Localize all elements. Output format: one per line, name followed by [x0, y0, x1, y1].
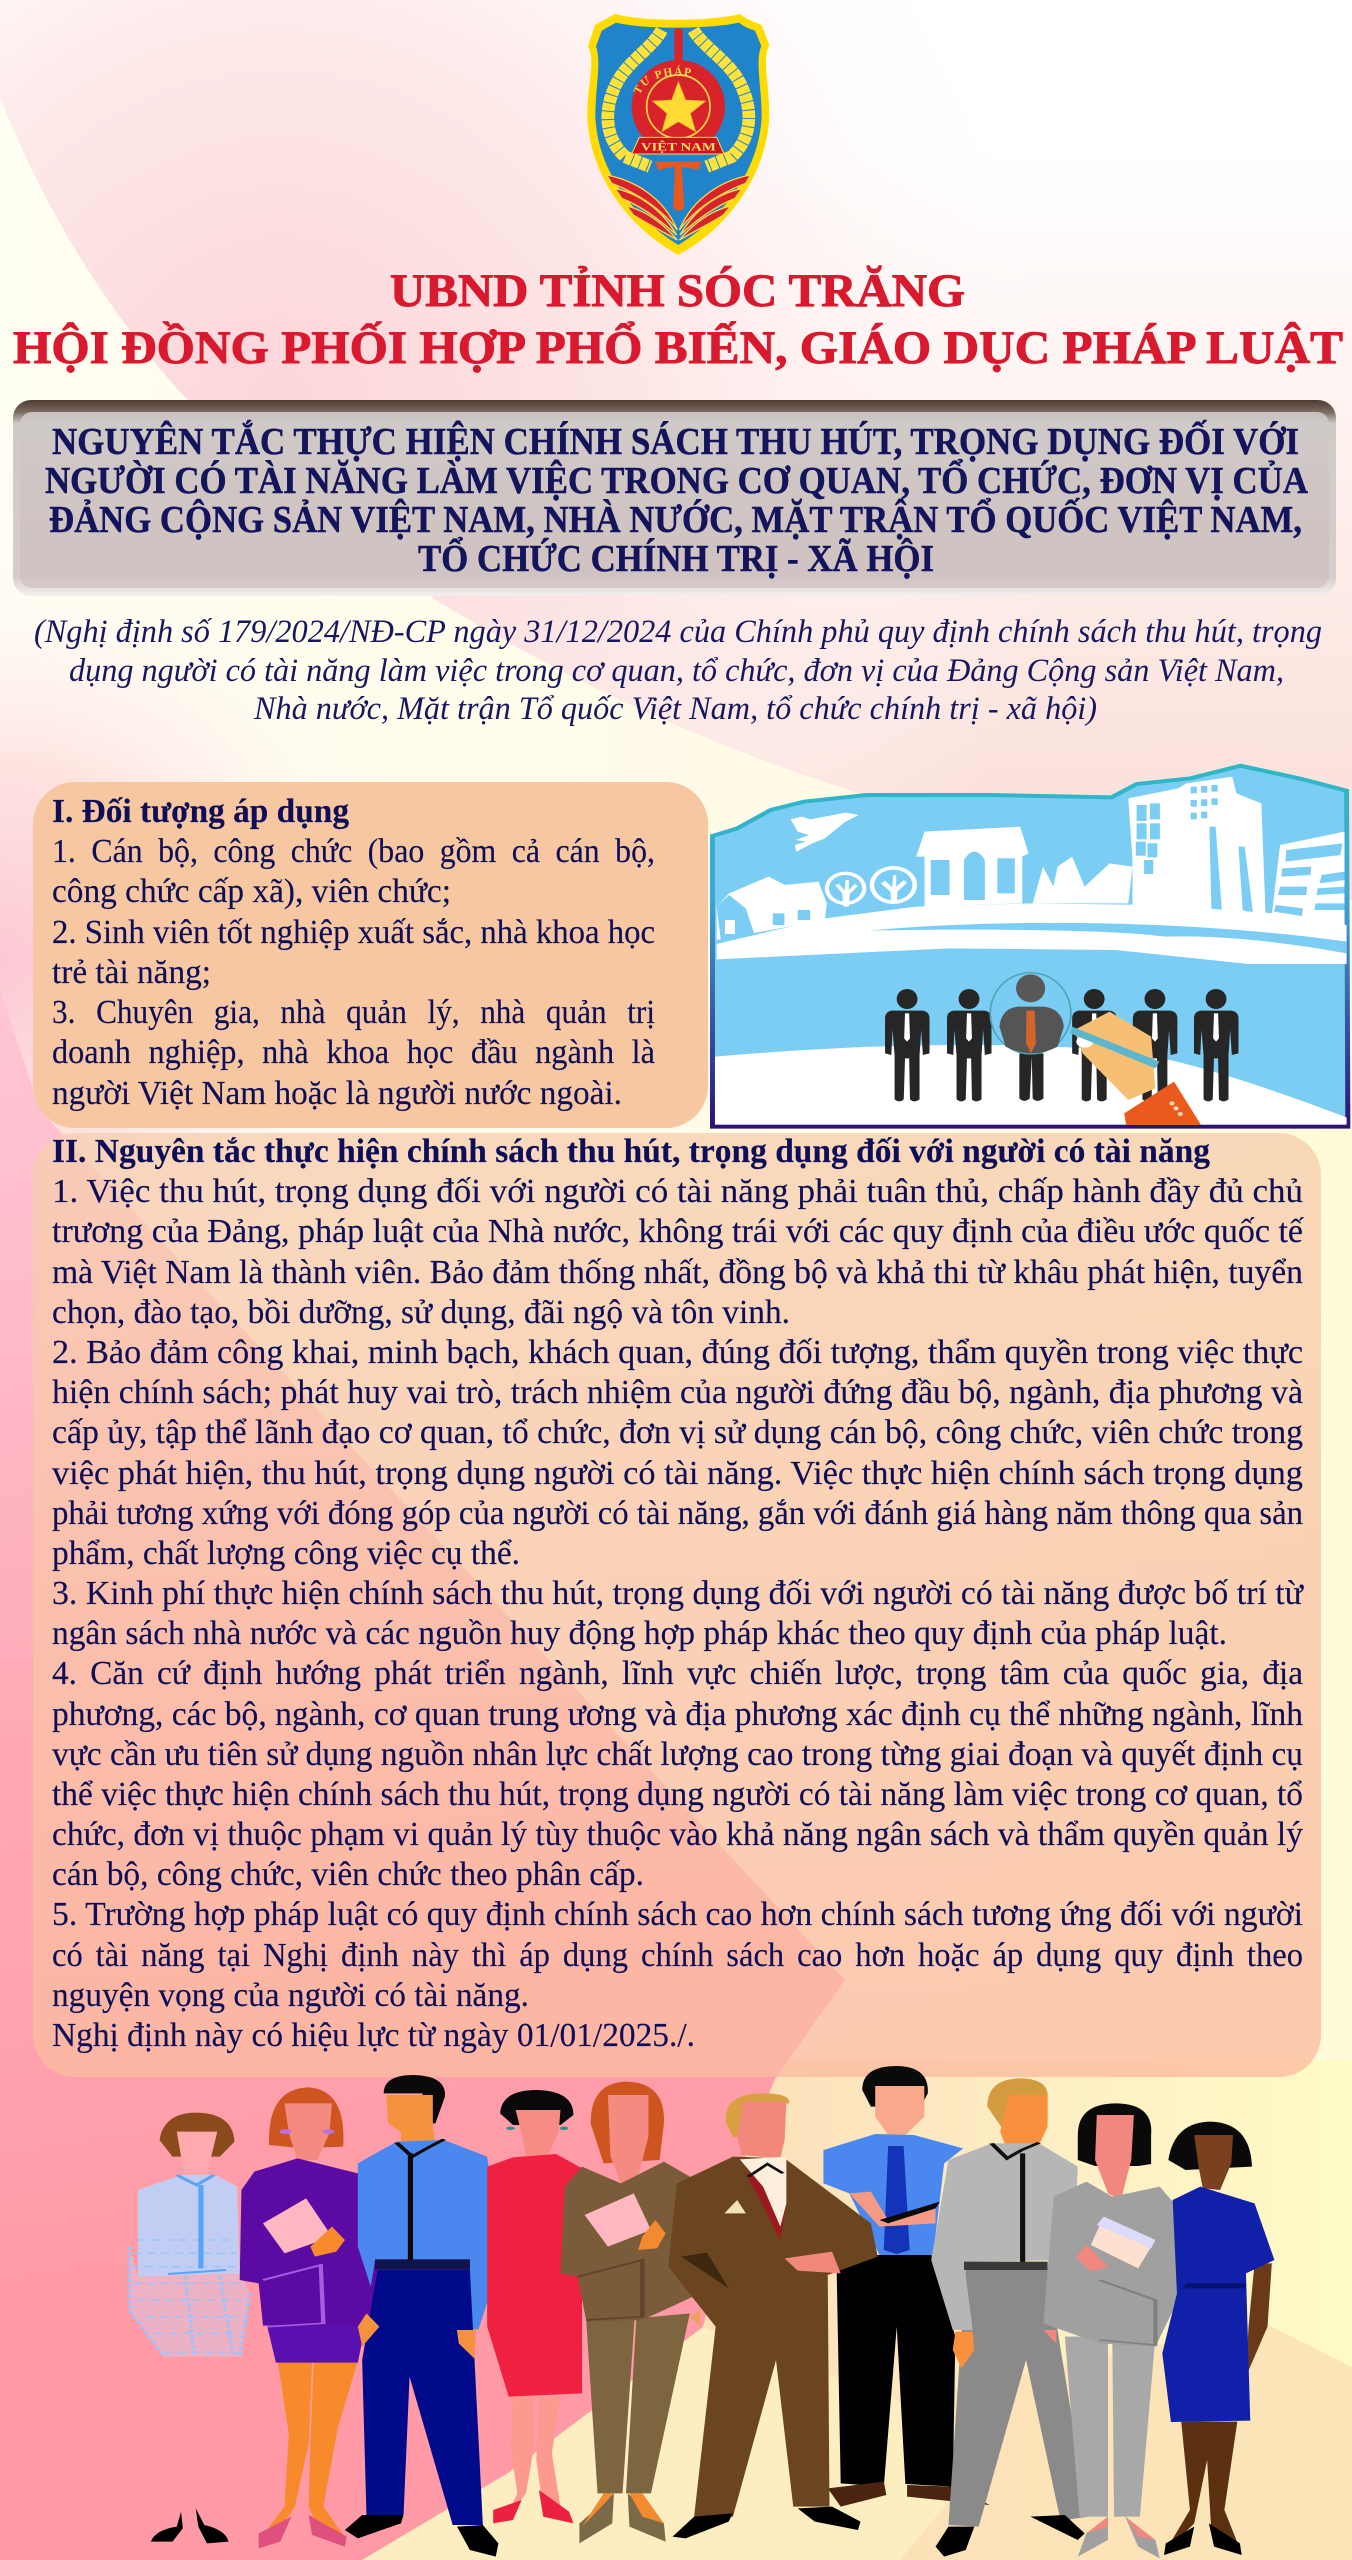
- panel: II. principles of implementation: 5. Trường hợp pháp luật có quy định chính sách cao hơn chính sách tương ứng đối với người: [52, 1896, 1303, 1933]
- panel: I. subjects of application: người Việt Nam hoặc là người nước ngoài.: [52, 1075, 622, 1112]
- plane: [791, 813, 859, 852]
- panel: I. subjects of application: doanh nghiệp, nhà khoa học đầu ngành là: [52, 1034, 655, 1071]
- panel: II. principles of implementation: phải tương xứng với đóng góp của người có tài năng, gắn với đánh giá hàng năm thông qua sản: [52, 1495, 1303, 1532]
- panel: II. principles of implementation: chức, đơn vị thuộc phạm vi quản lý tùy thuộc vào khả năng ngân sách và thẩm quyền quản lý: [52, 1816, 1303, 1853]
- panel: II. principles of implementation: 2. Bảo đảm công khai, minh bạch, khách quan, đúng đối tượng, thẩm quyền trong việc thực: [52, 1334, 1303, 1371]
- panel: I. subjects of application: công chức cấp xã), viên chức;: [52, 873, 451, 910]
- panel: II. principles of implementation: cấp ủy, tập thể lãnh đạo cơ quan, tổ chức, đơn vị sử dụng cán bộ, công chức, viên chức trong: [52, 1414, 1303, 1451]
- ghost woman in pale blue: [129, 2113, 250, 2543]
- man in brown suit at centre: [668, 2093, 878, 2538]
- panel: II. principles of implementation: II. Nguyên tắc thực hiện chính sách thu hút, trọng dụng đối với người có tài năng: [52, 1133, 1210, 1170]
- logo: Tư pháp shield: [587, 14, 770, 255]
- panel: II. principles of implementation: 4. Căn cứ định hướng phát triển ngành, lĩnh vực chiến lược, trọng tâm của quốc gia, địa: [52, 1655, 1303, 1692]
- illustration: group of office workers: [128, 2066, 1274, 2558]
- panel: II. principles of implementation: hiện chính sách; phát huy vai trò, trách nhiệm của người đứng đầu bộ, ngành, địa phương và: [52, 1374, 1303, 1411]
- subtitle: decree citation: (Nghị định số 179/2024/NĐ-CP ngày 31/12/2024 của Chính phủ quy định chính sách thu hút, trọng: [34, 614, 1322, 650]
- panel: II. principles of implementation: trương của Đảng, pháp luật của Nhà nước, không trái với các quy định của điều ước quốc tế: [52, 1213, 1304, 1250]
- woman in red dress: [487, 2090, 582, 2523]
- snowy hill: [715, 1045, 1347, 1125]
- panel: I. subjects of application: 1. Cán bộ, công chức (bao gồm cả cán bộ,: [52, 833, 655, 870]
- panel: II. principles of implementation: có tài năng tại Nghị định này thì áp dụng chính sách cao hơn hoặc áp dụng quy định theo: [52, 1937, 1303, 1974]
- illustration: selecting talent in a city scene: [710, 764, 1350, 1129]
- title: HỘI ĐỒNG PHỐI HỢP PHỔ BIẾN, GIÁO DỤC PHÁP LUẬT: [13, 320, 1343, 374]
- hand with pen: [1074, 1012, 1155, 1100]
- panel: II. principles of implementation: thể việc thực hiện chính sách thu hút, trọng dụng người có tài năng làm việc trong cơ quan, tổ: [52, 1776, 1303, 1813]
- panel: II. principles of implementation: phương, các bộ, ngành, cơ quan trung ương và địa phương xác định cụ thể những ngành, lĩnh: [52, 1696, 1303, 1733]
- panel: I. subjects of application: 2. Sinh viên tốt nghiệp xuất sắc, nhà khoa học: [52, 914, 655, 951]
- panel: I. subjects of application: 3. Chuyên gia, nhà quản lý, nhà quản trị: [52, 994, 655, 1031]
- panel: II. principles of implementation: phẩm, chất lượng công việc cụ thể.: [52, 1535, 520, 1572]
- panel: II. principles of implementation: mà Việt Nam là thành viên. Bảo đảm thống nhất, đồng bộ và khả thi từ khâu phát hiện, tuyển: [52, 1254, 1303, 1291]
- subtitle: decree citation: dụng người có tài năng làm việc trong cơ quan, tổ chức, đơn vị của Đảng Cộng sản Việt Nam,: [69, 653, 1284, 689]
- panel: II. principles of implementation: 3. Kinh phí thực hiện chính sách thu hút, trọng dụng đối với người có tài năng được bố trí từ: [52, 1575, 1305, 1612]
- panel: II. principles of implementation: 1. Việc thu hút, trọng dụng đối với người có tài năng phải tuân thủ, chấp hành đầy đủ chủ: [52, 1173, 1303, 1210]
- logo: Tư pháp shield: VIỆT NAM: [641, 141, 716, 154]
- panel: I. subjects of application: [33, 782, 708, 1128]
- panel: II. principles of implementation: ngân sách nhà nước và các nguồn huy động hợp pháp khác theo quy định của pháp luật.: [52, 1615, 1227, 1652]
- panel: II. principles of implementation: [33, 1133, 1321, 2077]
- panel: I. subjects of application: trẻ tài năng;: [52, 954, 211, 991]
- ground bands: [717, 903, 1347, 964]
- row of people: [885, 989, 1238, 1101]
- man with black trousers: [823, 2066, 990, 2507]
- title: UBND TỈNH SÓC TRĂNG: [390, 265, 965, 317]
- panel: II. principles of implementation: vực cần ưu tiên sử dụng nguồn nhân lực chất lượng cao trong từng giai đoạn và quyết định cụ: [52, 1736, 1303, 1773]
- panel: II. principles of implementation: cán bộ, công chức, viên chức theo phân cấp.: [52, 1856, 644, 1893]
- woman in purple suit: [240, 2087, 381, 2548]
- panel: II. principles of implementation: Nghị định này có hiệu lực từ ngày 01/01/2025./.: [52, 2017, 695, 2054]
- man in gray shirt: [931, 2078, 1088, 2557]
- man in blue shirt: [345, 2075, 502, 2557]
- banner heading: [13, 400, 1336, 596]
- woman with dark skin in navy dress: [1162, 2122, 1274, 2555]
- panel: II. principles of implementation: chọn, đào tạo, bồi dưỡng, sử dụng, đãi ngộ và tôn vinh.: [52, 1294, 790, 1331]
- logo: Tư pháp shield: TƯ PHÁP: [633, 65, 691, 94]
- title: [13, 265, 1343, 374]
- subtitle: decree citation: Nhà nước, Mặt trận Tổ quốc Việt Nam, tổ chức chính trị - xã hội): [253, 691, 1097, 727]
- panel: II. principles of implementation: việc phát hiện, thu hút, trọng dụng người có tài năng. Việc thực hiện chính sách trọng dụng: [52, 1455, 1303, 1492]
- subtitle: decree citation: [34, 614, 1322, 727]
- skyline: [717, 777, 1345, 940]
- banner heading: TỔ CHỨC CHÍNH TRỊ - XÃ HỘI: [418, 537, 934, 580]
- panel: I. subjects of application: I. Đối tượng áp dụng: [52, 793, 349, 830]
- panel: II. principles of implementation: nguyện vọng của người có tài năng.: [52, 1977, 529, 2014]
- highlighted person in circle: [990, 973, 1071, 1054]
- woman in brown suit: [560, 2082, 700, 2543]
- woman in gray suit: [1043, 2103, 1181, 2558]
